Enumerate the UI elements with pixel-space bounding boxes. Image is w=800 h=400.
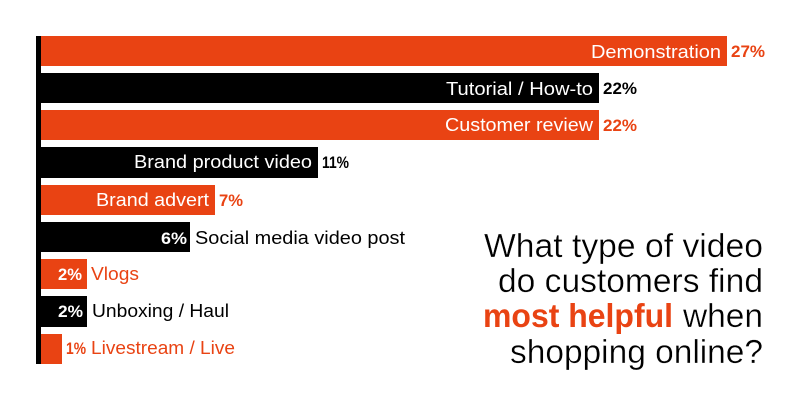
bar: Brand advert	[41, 185, 243, 215]
axis line	[36, 36, 41, 364]
bar: Demonstration	[41, 36, 765, 66]
bar: Tutorial / How-to: 22%	[603, 80, 637, 98]
bar: Vlogs: Vlogs	[91, 264, 139, 284]
bar: Livestream / Live: 1%	[66, 340, 86, 358]
title: What type of video	[484, 227, 763, 264]
bar: Vlogs	[41, 259, 139, 289]
bar: Social media video post	[36, 222, 405, 252]
bar: Social media video post: Social media video post	[195, 228, 405, 248]
bar: Vlogs: 2%	[58, 266, 82, 284]
bar: Customer review: Customer review	[445, 115, 594, 135]
bar: Brand product video: Brand product video	[134, 152, 312, 172]
bar: Unboxing / Haul: 2%	[58, 303, 83, 321]
bar: Brand product video: 11%	[322, 154, 349, 172]
title: when	[682, 297, 763, 334]
bar: Tutorial / How-to	[36, 73, 637, 103]
title	[483, 227, 763, 370]
bar: Livestream / Live: Livestream / Live	[91, 338, 235, 358]
bar: Brand product video	[36, 147, 349, 178]
bar chart	[36, 36, 765, 364]
bar: Brand advert: Brand advert	[96, 190, 209, 210]
bar: Social media video post: 6%	[161, 230, 187, 248]
bar: Customer review: 22%	[603, 117, 637, 135]
bar: Unboxing / Haul: Unboxing / Haul	[92, 301, 229, 321]
bar: Demonstration: 27%	[731, 43, 765, 61]
bar: Customer review	[41, 110, 637, 140]
title: do customers find	[498, 262, 763, 299]
title: shopping online?	[510, 333, 763, 370]
bar: Tutorial / How-to: Tutorial / How-to	[446, 79, 593, 99]
title: most helpful	[483, 297, 673, 334]
bar: Livestream / Live	[41, 334, 235, 364]
bar: Unboxing / Haul	[36, 296, 229, 327]
bar: Demonstration: Demonstration	[591, 42, 721, 62]
bar: Brand advert: 7%	[219, 192, 243, 210]
